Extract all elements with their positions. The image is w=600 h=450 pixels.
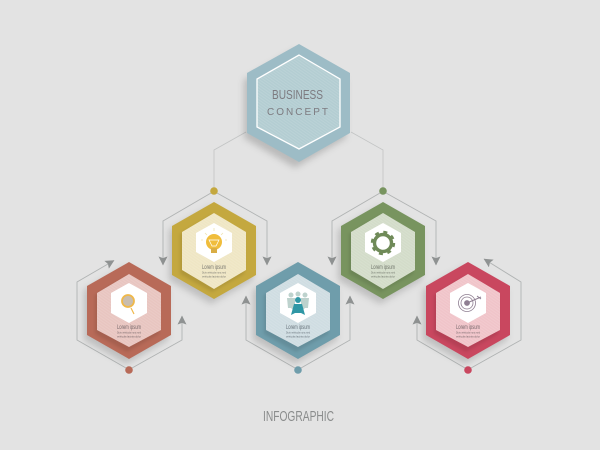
text: lorem ipsum (117, 325, 141, 338)
panel: yellow idea hexagon (169, 202, 256, 304)
title (267, 87, 328, 118)
text: lorem ipsum: vehicula lacinia dolor (202, 274, 226, 278)
panel: crimson target hexagon (423, 262, 510, 364)
arrows: yellow step (163, 193, 267, 265)
text: lorem ipsum: Lorem ipsum (286, 325, 310, 331)
text: lorem ipsum (371, 265, 395, 278)
panel: business concept hexagon (244, 44, 350, 168)
arrows: blue step (246, 296, 350, 368)
panel: green gear hexagon (338, 202, 425, 304)
arrows: green step (332, 193, 436, 265)
text: lorem ipsum: Duis vehicula nunc sed (117, 330, 141, 334)
icon: target (458, 294, 481, 312)
text: lorem ipsum: vehicula lacinia dolor (371, 274, 395, 278)
icon: team (287, 292, 309, 315)
text: lorem ipsum: Lorem ipsum (117, 325, 141, 331)
connector dots (125, 187, 472, 374)
text: lorem ipsum: Duis vehicula nunc sed (202, 270, 226, 274)
text: lorem ipsum: vehicula lacinia dolor (117, 334, 141, 338)
icon: light bulb (201, 228, 227, 253)
text: lorem ipsum: Lorem ipsum (202, 265, 226, 271)
text: lorem ipsum: Lorem ipsum (456, 325, 480, 331)
footer label: INFOGRAPHIC (263, 408, 334, 425)
connector lines from business concept (214, 132, 383, 188)
text: lorem ipsum: Duis vehicula nunc sed (456, 330, 480, 334)
arrows: brown step (77, 260, 182, 368)
text: lorem ipsum: Duis vehicula nunc sed (371, 270, 395, 274)
text: lorem ipsum (456, 325, 480, 338)
text: lorem ipsum (202, 265, 226, 278)
title: BUSINESS (272, 87, 323, 102)
title: CONCEPT (267, 107, 328, 118)
text: lorem ipsum: Duis vehicula nunc sed (286, 330, 310, 334)
text: lorem ipsum (286, 325, 310, 338)
panel: blue team hexagon (253, 262, 340, 364)
panel: brown search hexagon (84, 262, 171, 364)
icon: magnifier (122, 295, 134, 314)
text: lorem ipsum: vehicula lacinia dolor (286, 334, 310, 338)
text: lorem ipsum: Lorem ipsum (371, 265, 395, 271)
text: lorem ipsum: vehicula lacinia dolor (456, 334, 480, 338)
icon: gear (372, 232, 394, 254)
arrows: crimson step (417, 259, 521, 368)
